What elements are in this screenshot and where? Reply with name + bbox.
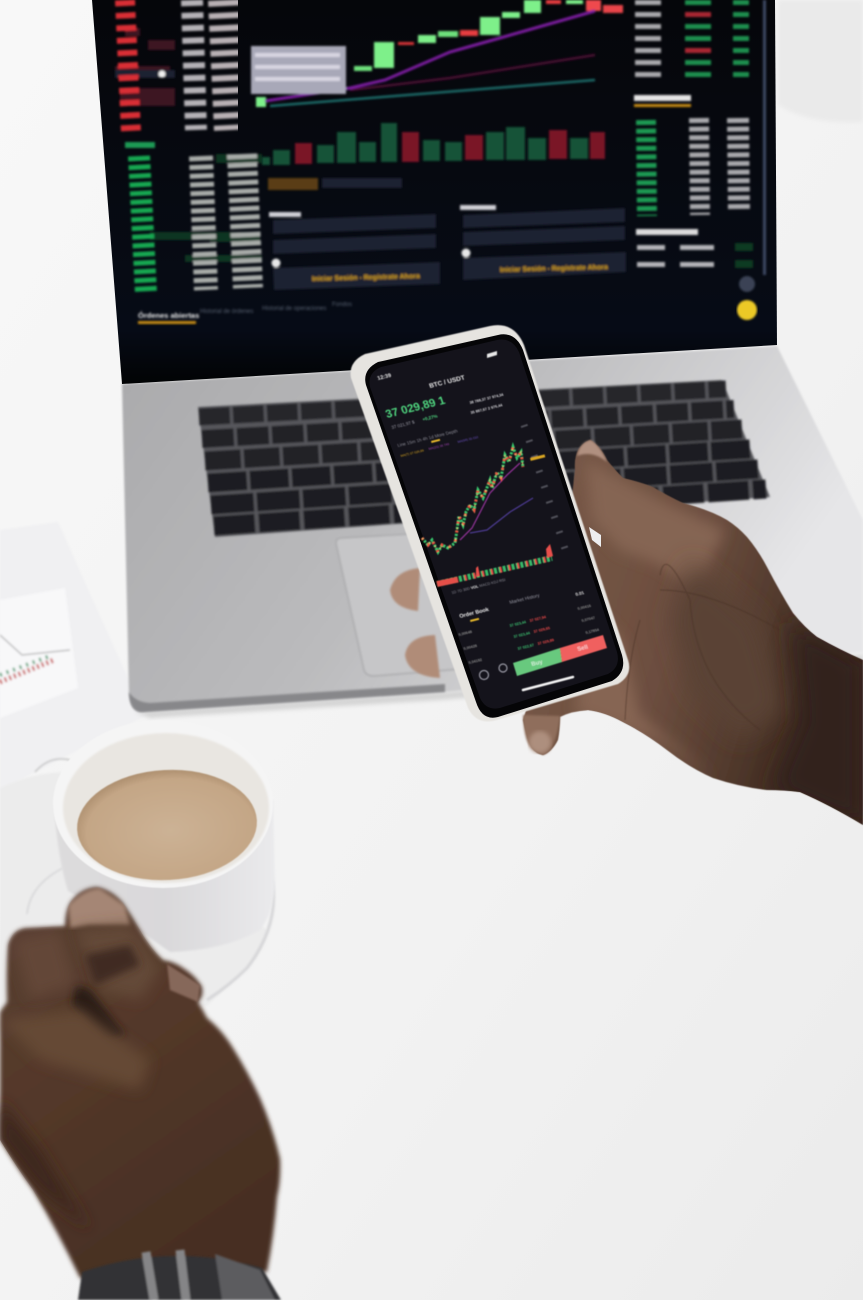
order book rows: 0,17954 (585, 628, 600, 635)
smartphone (351, 325, 629, 722)
left hand holding cup (0, 887, 280, 1278)
buy and sell forms: Iniciar Sesión - Regístrate Ahora (500, 264, 608, 274)
order book rows: 0,07047 (581, 616, 596, 623)
hand silhouette (0, 887, 280, 1278)
buy button: Buy (531, 659, 544, 668)
status bar: 12:39 (377, 373, 392, 382)
home indicator (523, 677, 573, 690)
order book rows: 0,00416 (577, 604, 592, 611)
hand shading (575, 450, 863, 830)
bottom tabs: Historial de órdenes (200, 309, 253, 315)
saucer inner ring (27, 868, 63, 914)
phone volume chart (437, 544, 553, 584)
hand holding phone (390, 440, 863, 830)
sell button (560, 635, 607, 662)
bottom nav icons (480, 664, 507, 680)
order book rows (458, 604, 600, 665)
buy button (513, 648, 562, 676)
order book rows: 37 029,65 (533, 626, 551, 634)
order book heading (459, 590, 585, 622)
price readout: 37 021,97 $ (391, 419, 416, 430)
phone screen (369, 340, 618, 709)
laptop front edge (129, 684, 445, 712)
coffee (74, 765, 260, 885)
price tooltip (251, 46, 346, 94)
price chart on phone (422, 447, 533, 552)
order book rows: 37 029,89 (537, 638, 555, 646)
sell button: Sell (577, 645, 589, 653)
finger below phone (523, 715, 560, 755)
cup inner wall (63, 733, 269, 883)
time tabs: MA(25) 36 749 (428, 442, 450, 451)
hand shading (0, 888, 200, 1230)
order book heading: Market History (509, 593, 541, 606)
bottom tabs: Fondos (332, 302, 352, 308)
bottom tabs: Órdenes abiertas (138, 311, 199, 320)
order book rows: 37 023,44 (509, 620, 528, 628)
gap between thumb and palm (589, 527, 601, 547)
saucer (0, 772, 267, 1010)
keyboard (198, 380, 770, 537)
interval tabs: 1D 7D 30D VOL MACD KDJ RSI (451, 578, 506, 595)
laptop screen (92, 0, 777, 384)
laptop (92, 0, 863, 718)
fingertips behind phone (390, 568, 440, 678)
bottom tabs: Historial de operaciones (262, 306, 326, 312)
login prompt text: Iniciar Sesión - Regístrate Ahora (312, 273, 420, 283)
order book heading: Order Book (459, 607, 491, 620)
order book rows: 37 023,44 (513, 631, 532, 639)
palm and thumb (523, 440, 863, 825)
laptop base (122, 346, 863, 712)
trackpad (336, 530, 510, 676)
order book heading: 0.01 (575, 590, 585, 597)
price readout (384, 393, 505, 430)
palm creases (625, 564, 790, 785)
bottom tabs (138, 302, 352, 324)
time tabs (397, 428, 479, 458)
time tabs: MA(7) 37 029,89 (400, 448, 425, 458)
coffee cup and saucer (0, 720, 275, 1010)
thumb nail (577, 440, 607, 462)
price readout: 35 897,67 2 976,44 (470, 403, 504, 415)
order book rows: 0,04192 (468, 658, 483, 665)
phone bezel (365, 334, 623, 718)
phone case (351, 325, 629, 722)
fingertip highlight (529, 731, 551, 753)
price readout: +0,27% (422, 414, 438, 422)
paper with chart on desk (0, 522, 145, 790)
time tabs: Line 15m 1h 4h 1d More Depth (397, 428, 459, 448)
order book rows: 0,00648 (458, 630, 473, 637)
time tabs: MA(99) 35 010 (457, 435, 479, 444)
cup body (54, 800, 275, 952)
order book rows: 0,00428 (463, 644, 478, 651)
price readout: 38 788,37 37 974,34 (469, 393, 505, 405)
sell order book (115, 0, 232, 132)
status bar: BTC / USDT (428, 375, 466, 390)
wristwatch (78, 1250, 281, 1300)
right market columns (634, 0, 766, 275)
phone screen contents (377, 351, 607, 690)
candlestick chart (251, 0, 623, 107)
volume bars (262, 123, 605, 165)
phone price tag (530, 454, 545, 461)
status bar (377, 351, 497, 390)
laptop shadow (135, 655, 863, 718)
order book rows: 37 022,67 (517, 643, 535, 651)
cup rim (53, 720, 273, 888)
support buttons (737, 276, 757, 320)
buy order book (125, 142, 262, 293)
price readout: 37 029,89 1 (384, 395, 447, 421)
phone price axis (524, 425, 566, 552)
saucer rim (207, 880, 274, 1000)
buy and sell forms (268, 178, 626, 290)
blurred object top right (778, 0, 863, 122)
order book rows: 37 027,94 (529, 615, 548, 623)
